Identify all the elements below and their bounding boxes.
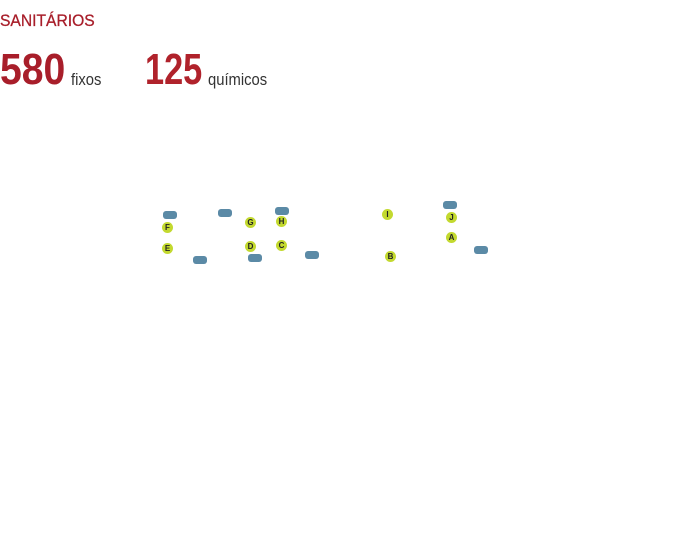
point C	[276, 240, 287, 251]
heading: sanitários: SANITÁRIOS	[0, 11, 95, 30]
blue marker 1	[163, 211, 177, 219]
map markers: blue sanitary units and lettered green points	[162, 201, 488, 264]
point H: H	[279, 217, 284, 226]
blue marker 7	[443, 201, 457, 209]
point D: D	[248, 242, 253, 251]
point I	[382, 209, 393, 220]
point A: A	[449, 233, 454, 242]
point A	[446, 232, 457, 243]
blue marker 6	[305, 251, 319, 259]
point J	[446, 212, 457, 223]
point J: J	[449, 213, 454, 222]
number: 125: 125	[145, 45, 202, 94]
point G: G	[247, 218, 254, 227]
stat: 580 fixos	[0, 45, 101, 94]
point E: E	[165, 244, 170, 253]
blue marker 8	[474, 246, 488, 254]
point B: B	[388, 252, 393, 261]
point I: I	[386, 210, 389, 219]
label: fixos: fixos	[71, 70, 101, 89]
blue marker 3	[275, 207, 289, 215]
number: 580: 580	[0, 45, 65, 94]
point F	[162, 222, 173, 233]
point E	[162, 243, 173, 254]
stat: 125 químicos	[145, 45, 267, 94]
blue marker 2	[218, 209, 232, 217]
blue marker 4	[193, 256, 207, 264]
point H	[276, 216, 287, 227]
point B	[385, 251, 396, 262]
point C: C	[279, 241, 284, 250]
label: químicos: químicos	[208, 70, 267, 89]
blue marker 5	[248, 254, 262, 262]
point F: F	[165, 223, 170, 232]
point G	[245, 217, 256, 228]
point D	[245, 241, 256, 252]
